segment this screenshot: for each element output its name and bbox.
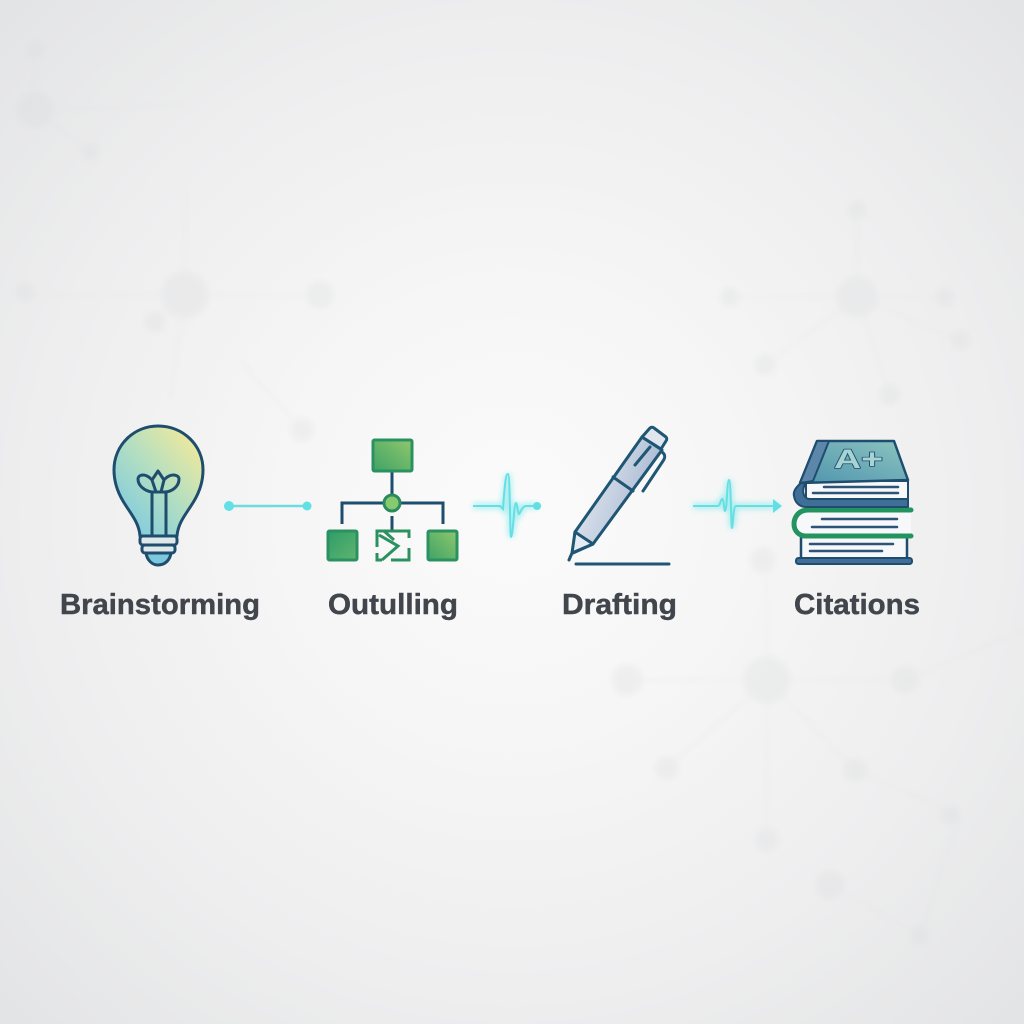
label: Brainstorming: Brainstorming [60, 589, 260, 621]
grade mark: A+ [834, 444, 883, 474]
green book [794, 510, 911, 536]
label: Outulling: Outulling [328, 589, 458, 621]
bottom book [796, 537, 912, 564]
label: Drafting: Drafting [562, 589, 677, 621]
arrow: connector 1 [224, 501, 312, 511]
icon: stack of books [794, 441, 912, 564]
arrow: pulse connector 3 [693, 480, 782, 528]
icon: pen [569, 427, 669, 564]
icon: outline hierarchy [328, 440, 457, 560]
label: Citations: Citations [794, 589, 920, 621]
arrow: pulse connector 2 [473, 474, 541, 537]
icon: light bulb [114, 426, 203, 565]
